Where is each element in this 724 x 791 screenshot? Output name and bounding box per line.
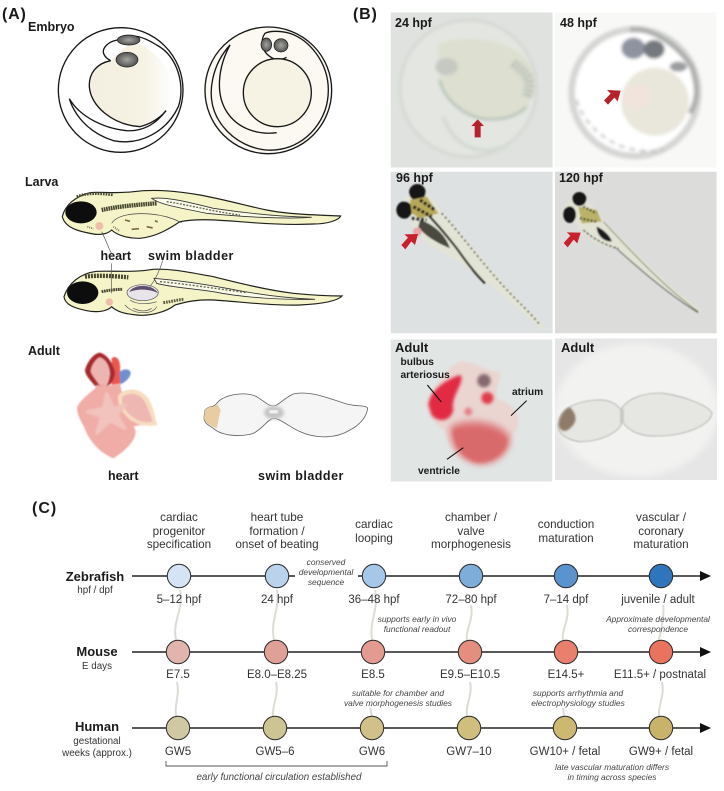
human stage times: GW9+ / fetal bbox=[629, 746, 693, 758]
mouse label: Mouse bbox=[76, 644, 118, 659]
mouse stage markers bbox=[166, 640, 673, 664]
label: bulbus arteriosus: bulbus bbox=[400, 357, 434, 368]
panel A: anatomy illustrations bbox=[2, 6, 368, 483]
human stage markers bbox=[166, 716, 673, 740]
heading: Embryo: Embryo bbox=[28, 20, 75, 34]
note: late vascular maturation: late vascular maturation differs bbox=[555, 762, 670, 772]
zebrafish stage markers bbox=[167, 564, 673, 588]
human units: weeks (approx.) bbox=[61, 748, 132, 759]
zebrafish stage times: 7–14 dpf bbox=[544, 594, 589, 606]
illustration: embryo 1 bbox=[58, 28, 183, 152]
label: 120 hpf: 120 hpf bbox=[559, 171, 604, 185]
label: Adult (heart photo): Adult bbox=[395, 340, 429, 355]
note: approximate developmental correspondence: correspondence bbox=[628, 624, 688, 634]
photo: 96 hpf larva bbox=[391, 171, 553, 333]
human stage times: GW10+ / fetal bbox=[530, 746, 600, 758]
stage headings: chamber / bbox=[445, 511, 498, 524]
stage headings: morphogenesis bbox=[431, 538, 511, 551]
mouse stage times: E11.5+ / postnatal bbox=[614, 669, 706, 681]
note: conserved developmental sequence: developmental bbox=[299, 567, 354, 577]
human stage times: GW6 bbox=[359, 746, 385, 758]
illustration: adult swim bladder bbox=[204, 393, 368, 437]
note: supports early in vivo functional readout: supports early in vivo bbox=[378, 614, 457, 624]
note: supports arrhythmia and electrophysiology studies: supports arrhythmia and bbox=[533, 688, 623, 698]
stage headings: maturation bbox=[538, 532, 594, 545]
mouse stage times bbox=[166, 669, 706, 681]
zebrafish stage times: 5–12 hpf bbox=[157, 594, 202, 606]
stage headings: conduction bbox=[538, 518, 594, 531]
human row bbox=[61, 716, 711, 759]
human label: Human bbox=[75, 719, 119, 734]
stage headings: cardiac bbox=[355, 518, 393, 531]
note: approximate developmental correspondence: Approximate developmental bbox=[605, 614, 711, 624]
label: swim bladder (adult): swim bladder bbox=[258, 469, 344, 483]
illustration: embryo 2 bbox=[205, 27, 332, 154]
human stage times: GW5 bbox=[165, 746, 191, 758]
label: 48 hpf: 48 hpf bbox=[560, 16, 598, 30]
zebrafish stage times: 36–48 hpf bbox=[348, 594, 400, 606]
note: supports arrhythmia and electrophysiology studies: electrophysiology studies bbox=[531, 698, 626, 708]
zebrafish stage times: 24 hpf bbox=[261, 594, 294, 606]
stage headings: maturation bbox=[633, 538, 689, 551]
note: conserved developmental sequence: sequence bbox=[308, 577, 344, 587]
heading: Adult: Adult bbox=[28, 344, 61, 358]
note: suitable for chamber and valve morphogenesis studies: valve morphogenesis studies bbox=[344, 698, 453, 708]
mouse row bbox=[76, 640, 711, 681]
note: suitable for chamber and valve morphogenesis studies: suitable for chamber and bbox=[352, 688, 444, 698]
label: 24 hpf: 24 hpf bbox=[395, 16, 433, 30]
note: conserved developmental sequence: conserved bbox=[307, 557, 346, 567]
photo: 24 hpf embryo bbox=[391, 12, 553, 168]
photo: adult swim bladder bbox=[555, 338, 718, 480]
human stage times bbox=[165, 746, 693, 758]
bracket: early functional circulation bbox=[166, 761, 387, 766]
stage headings: formation / bbox=[249, 525, 305, 538]
stage headings: cardiac bbox=[160, 511, 198, 524]
stage headings: onset of beating bbox=[235, 538, 319, 551]
zebrafish stage times: 72–80 hpf bbox=[445, 594, 497, 606]
label: atrium: atrium bbox=[512, 387, 543, 398]
label: heart (larva): heart bbox=[100, 249, 132, 263]
illustration: larva bottom bbox=[64, 261, 342, 315]
zebrafish stage times: juvenile / adult bbox=[620, 594, 696, 606]
photo: 120 hpf larva bbox=[555, 171, 717, 333]
panel A label: (A) bbox=[2, 6, 27, 23]
mouse units: E days bbox=[82, 661, 112, 672]
stage headings: looping bbox=[355, 532, 393, 545]
stage headings bbox=[147, 511, 689, 551]
label: Adult (swim bladder photo): Adult bbox=[561, 340, 595, 355]
panel B: microscopy photographs bbox=[353, 6, 718, 482]
label: ventricle: ventricle bbox=[418, 466, 460, 477]
stage headings: specification bbox=[147, 538, 211, 551]
stage headings: progenitor bbox=[153, 525, 205, 538]
mouse stage times: E8.0–E8.25 bbox=[247, 669, 307, 681]
zebrafish units: hpf / dpf bbox=[77, 585, 113, 596]
stage headings: vascular / bbox=[636, 511, 687, 524]
illustration: larva top bbox=[62, 190, 341, 253]
zebrafish stage times bbox=[157, 594, 696, 606]
mouse stage times: E7.5 bbox=[166, 669, 190, 681]
photo: adult heart bbox=[391, 339, 552, 482]
heading: Larva: Larva bbox=[25, 175, 59, 189]
zebrafish label: Zebrafish bbox=[66, 569, 124, 584]
human axis bbox=[132, 723, 711, 733]
zebrafish row bbox=[66, 564, 711, 606]
label: 96 hpf: 96 hpf bbox=[396, 171, 434, 185]
note: late vascular maturation: in timing across species bbox=[568, 772, 657, 782]
bracket label: early functional circulation established bbox=[196, 772, 362, 783]
panel C label: (C) bbox=[32, 500, 57, 517]
human stage times: GW5–6 bbox=[256, 746, 294, 758]
panel C: developmental timeline bbox=[32, 500, 711, 783]
label: heart (adult): heart bbox=[108, 469, 139, 483]
illustration: adult heart bbox=[77, 353, 157, 458]
human stage times: GW7–10 bbox=[446, 746, 492, 758]
stage headings: heart tube bbox=[251, 511, 303, 524]
mouse stage times: E8.5 bbox=[361, 669, 385, 681]
correspondence links between species bbox=[175, 590, 663, 716]
mouse stage times: E14.5+ bbox=[548, 669, 585, 681]
panel B label: (B) bbox=[353, 6, 378, 23]
mouse axis bbox=[132, 647, 711, 657]
mouse stage times: E9.5–E10.5 bbox=[440, 669, 500, 681]
note: supports early in vivo functional readout: functional readout bbox=[384, 624, 451, 634]
zebrafish axis bbox=[132, 571, 711, 581]
label: bulbus arteriosus: arteriosus bbox=[400, 370, 450, 381]
human units: gestational bbox=[73, 736, 121, 747]
stage headings: valve bbox=[457, 525, 485, 538]
stage headings: coronary bbox=[638, 525, 684, 538]
photo: 48 hpf embryo bbox=[554, 12, 717, 168]
label: swim bladder (larva): swim bladder bbox=[148, 249, 234, 263]
